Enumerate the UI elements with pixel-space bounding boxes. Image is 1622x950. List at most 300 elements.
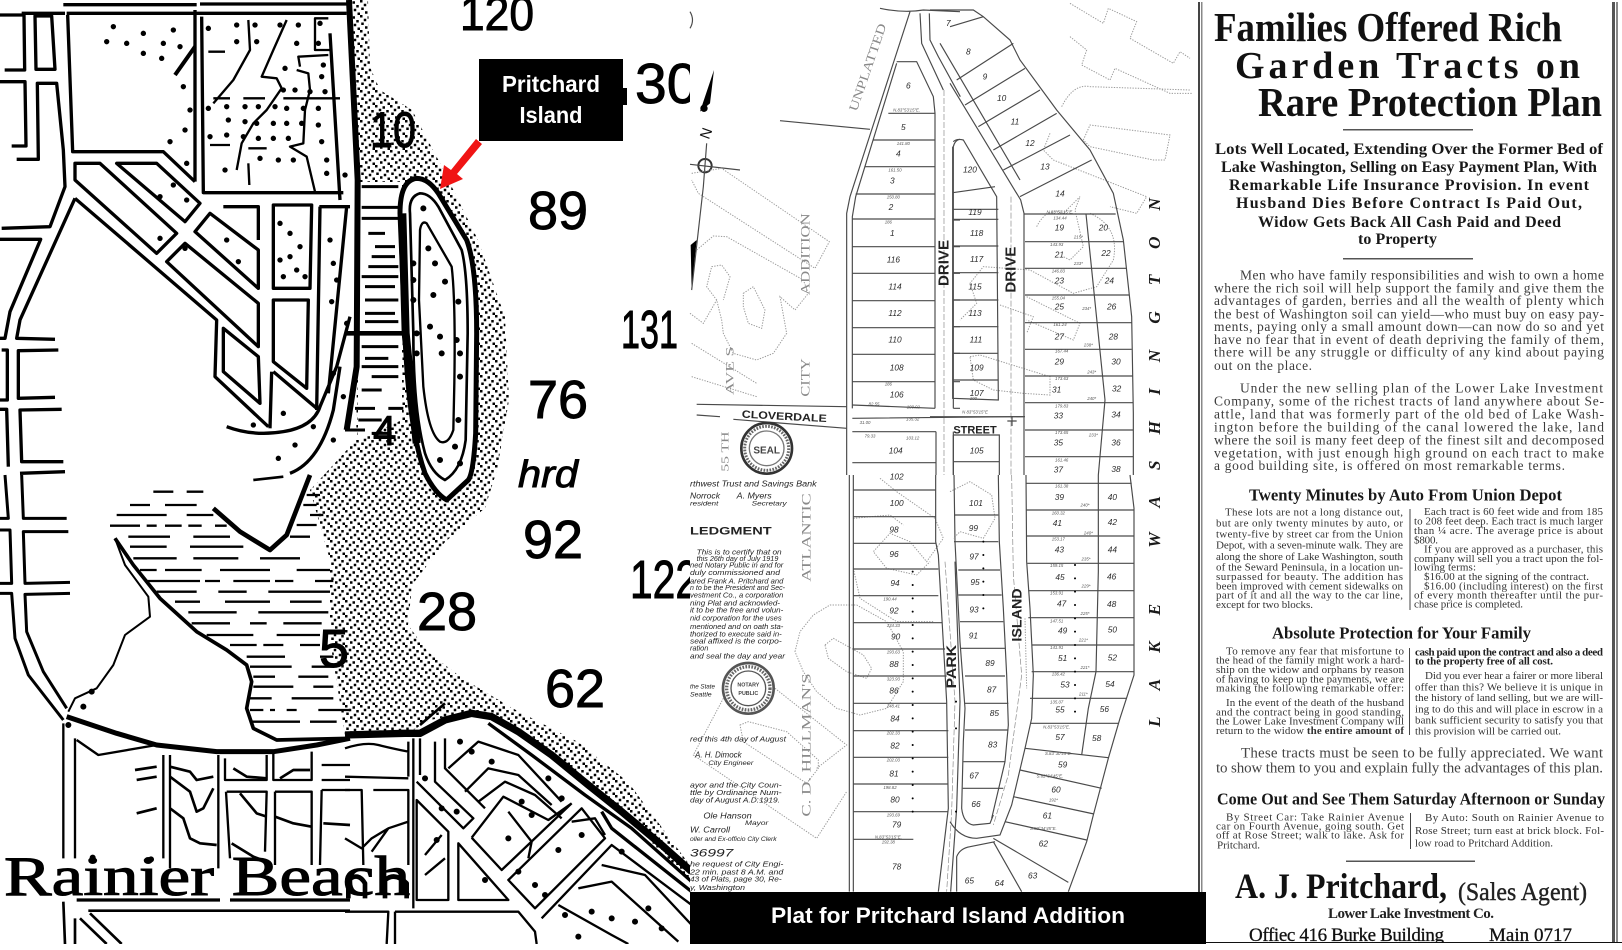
number 10: 10 (370, 102, 416, 158)
lot numbers: 323.93 (887, 676, 901, 681)
column: tract terms: to 208 feet deep. Each tract is much larger (1414, 515, 1603, 527)
column: distance: of the Seward Peninsula, in a location un- (1216, 562, 1403, 574)
number 89: 89 (528, 181, 588, 241)
lot numbers east rows: 115 (968, 281, 982, 291)
lot numbers: 202.33 (886, 730, 901, 735)
lot numbers east rows: 29 (1054, 356, 1064, 366)
column: remove any fear: the head of the family might work a hard- (1216, 655, 1404, 667)
corner seal (741, 423, 792, 474)
column: distance: Depot, with a seven-minute walk. They are (1216, 540, 1403, 552)
paragraph: family responsibilities: Men who have family responsibilities and wish to own a home (1240, 267, 1604, 282)
approval signatures: W. Carroll (690, 824, 731, 834)
column: remove any fear: To remove any fear that misfortune to (1226, 645, 1404, 657)
number 4: 4 (373, 407, 396, 454)
lot numbers: 39 (1055, 492, 1064, 502)
subheadline: Remarkable Life Insurance Provision. In event (1229, 177, 1590, 194)
lot numbers: 93 (969, 605, 979, 615)
acknowledgment paragraph: duly commissioned and (690, 568, 781, 577)
column: by street car: off at Rose Street; walk to lake. Ask for (1216, 830, 1404, 842)
lot numbers east rows: 109 (970, 362, 984, 372)
compass rose: N (698, 126, 716, 141)
lot numbers east rows: 119 (968, 207, 982, 217)
number 122: 122 (630, 550, 698, 610)
acknowledgment paragraph: n to be the President and Sec- (690, 583, 786, 592)
lot numbers: 44 (1108, 544, 1117, 554)
number 62: 62 (545, 659, 605, 719)
street name: Cloverdale: CLOVERDALE (742, 409, 827, 425)
lot numbers: S.82°34'45"E. (1030, 826, 1057, 831)
column: remove any fear: and the contract being in good standing, (1216, 706, 1404, 718)
column: fairer offer: the history of land selling, but we are will- (1415, 692, 1603, 704)
lot numbers: 221* (1080, 665, 1090, 670)
column: distance: been improved with cement sidewalks on (1216, 580, 1404, 592)
hard label: hrd (518, 454, 580, 496)
lot numbers east rows: 113 (968, 308, 982, 318)
column: distance (1216, 507, 1404, 611)
acknowledgment paragraph: thorized to execute said in- (690, 630, 782, 639)
lot numbers west row: 6 (906, 81, 911, 91)
column: tract terms: of every month thereafter until the pur- (1414, 590, 1603, 602)
lot numbers: 60 (1051, 785, 1061, 795)
lot numbers: 50 (1108, 625, 1117, 635)
lot numbers: 100 (890, 498, 904, 508)
acknowledgment paragraph: mentioned and on oath sta- (690, 622, 784, 631)
column: distance: These lots are not a long distance out, (1225, 507, 1403, 519)
lot numbers east rows: 25 (1054, 301, 1064, 311)
lot numbers: 161.38 (1055, 484, 1069, 489)
lot numbers east rows: 21 (1054, 250, 1064, 260)
subheadline: Husband Dies Before Contract Is Paid Out, (1236, 195, 1582, 212)
lot numbers west row: 141.80 (897, 141, 911, 146)
panel: plat for Pritchard Island Addition (689, 3, 1206, 944)
heading: Come Out: Come Out and See Them Saturday Afternoon or Sunday (1217, 789, 1605, 808)
paragraph: family responsibilities: the best of Washington soil can yield—who must buy on easy pay- (1214, 306, 1604, 321)
acknowledgment paragraph: ration (690, 644, 708, 653)
paragraph: selling plan: Company, some of the richest tracts of land anywhere about Se- (1214, 393, 1604, 408)
rule (1343, 258, 1473, 260)
lot numbers east rows: 14 (1055, 189, 1065, 199)
lot numbers: 55 (1055, 705, 1065, 715)
lot numbers west row: 82.55 (869, 401, 880, 406)
lot numbers: 81 (889, 769, 899, 779)
lot numbers east rows: 117 (970, 254, 984, 264)
lot numbers: N.83°53'15"E. (875, 834, 902, 839)
panel: newspaper advertisement (1198, 2, 1622, 946)
lot numbers: 102 (890, 471, 904, 481)
lot numbers: 101 (969, 498, 983, 508)
lot numbers: 67 (969, 771, 979, 781)
lot numbers east rows: 120 (963, 165, 977, 175)
column: distance: twenty-five by street car from the Union (1216, 528, 1404, 540)
lot numbers: 82 (890, 740, 900, 750)
lot numbers: 248.41 (886, 704, 901, 709)
road name: Drive east: DRIVE (1004, 246, 1020, 293)
approval signatures: oller and Ex-officio City Clerk (690, 837, 778, 843)
company: Lower Lake Investment Co. (1328, 906, 1494, 922)
column: tract terms: than ¼ acre. The average price is about (1414, 525, 1603, 537)
road name: Island: ISLAND (1009, 588, 1025, 642)
acknowledgment paragraph: it to be the free and volun- (690, 605, 784, 614)
lot numbers (875, 471, 904, 871)
column: remove any fear: ship on the widow and orphans by reason (1216, 664, 1404, 676)
lot numbers: 57 (1055, 732, 1065, 742)
lot numbers west row: 186 (885, 219, 893, 224)
plat north-west sheet (690, 8, 1023, 475)
subheadline: Widow Gets Back All Cash Paid and Deed (1258, 214, 1561, 231)
lot numbers: 134.33 (887, 623, 901, 628)
lot numbers: 62 (1039, 839, 1048, 849)
road name: Park: PARK (943, 645, 959, 688)
contour lines (690, 168, 829, 397)
lot numbers east rows: 37 (1054, 465, 1063, 475)
column: tract terms: company will sell you a tract upon the fol- (1414, 553, 1603, 565)
number 28: 28 (417, 582, 477, 642)
lot numbers east rows: 36 (1111, 437, 1121, 447)
callout: Pritchard Island label: Island (520, 102, 582, 128)
lot numbers: 51 (1058, 653, 1067, 663)
label: City: CITY (798, 358, 812, 397)
lot numbers west row: 112 (888, 308, 902, 318)
subheadline: Lake Washington, Selling on Easy Payment Plan, With (1221, 159, 1597, 176)
lot numbers east rows: 240* (1086, 396, 1096, 401)
lot numbers: 53 (1060, 680, 1070, 690)
column: tract terms: $16.00 at the signing of the contract. (1424, 571, 1589, 583)
trust signature block: Norrock (690, 490, 721, 500)
lot numbers east rows: 105 (970, 445, 984, 455)
lot numbers: 63 (1028, 871, 1038, 881)
lot numbers west row: 3 (890, 175, 895, 185)
lot numbers west row: 31.00 (860, 420, 871, 425)
trust signature block: Secretary (752, 502, 788, 508)
label: C. D. Hillman's: C. D. HILLMAN'S (800, 673, 814, 817)
lot numbers: 40 (1108, 492, 1117, 502)
plat south-west sheet (689, 471, 960, 892)
lot numbers: 61 (1043, 810, 1052, 820)
lot numbers: 88 (889, 659, 899, 669)
paragraph: selling plan (1214, 381, 1604, 473)
lot numbers: 47 (1057, 599, 1067, 609)
lot numbers east rows: 161.24 (1053, 322, 1067, 327)
lot numbers: 78 (892, 861, 902, 871)
lot numbers east rows: 38 (1111, 464, 1121, 474)
lot numbers: S.82°34'45"E. (1037, 774, 1063, 779)
lot numbers: 221* (1078, 638, 1088, 643)
column: by street car: Pritchard. (1217, 839, 1260, 851)
street name: Street: STREET (953, 424, 997, 436)
lot numbers east rows: 32 (1112, 384, 1122, 394)
number 131: 131 (621, 300, 678, 360)
lot numbers east rows: 33 (1054, 410, 1063, 420)
trees and marks (107, 23, 347, 458)
paragraph: family responsibilities: have no fear that in event of death depriving the family of them, (1214, 332, 1604, 347)
lot numbers west row: 186 (885, 382, 893, 387)
label: Ave S: AVE S (724, 347, 736, 395)
column rules (1198, 2, 1622, 944)
paragraph: family responsibilities: where the rich soil will help support the family and give them the (1214, 280, 1604, 295)
column: tract terms: lowing terms: (1414, 562, 1476, 574)
lot numbers: 141.91 (1050, 645, 1064, 650)
plat south-east sheet (943, 475, 1134, 892)
agent name: A. J. Pritchard, (1235, 866, 1447, 906)
acknowledgment paragraph: Seattle (690, 693, 712, 699)
divider (1410, 509, 1411, 610)
lot numbers east rows: 161.46 (1055, 457, 1069, 462)
lot numbers east rows: 100 (970, 396, 978, 401)
approval signatures: y, Washington (689, 883, 745, 892)
lot numbers: 56 (1100, 704, 1109, 714)
trust signature block: A. Myers (736, 490, 772, 500)
paragraph: selling plan: Under the new selling plan of the Lower Lake Investment (1240, 381, 1603, 396)
island outlines (400, 178, 477, 500)
lot numbers: 192.38 (882, 840, 896, 845)
rule (1346, 860, 1475, 862)
lot numbers: 202.03 (886, 758, 901, 763)
paragraph: family responsibilities (1214, 267, 1604, 373)
paragraph: selling plan: where the soil is many feet deep of the finest silt and decomposed (1214, 432, 1604, 447)
paragraph: family responsibilities: there will be any struggle or difficulty of any kind about paying (1214, 345, 1604, 360)
number 30: 30 (635, 52, 698, 116)
callout: Pritchard Island label: Pritchard (502, 71, 600, 97)
lot numbers east rows: 13 (1040, 161, 1050, 171)
paragraph: selling plan: attle, land that was formerly part of the old bed of Lake Wash- (1214, 407, 1604, 422)
headline: Garden Tracts on (1235, 45, 1580, 87)
lot numbers west row: 150.80 (887, 194, 901, 199)
lot numbers east rows: 167.44 (1055, 349, 1069, 354)
road name: Drive: DRIVE (937, 240, 953, 286)
lot numbers: S.83°30'45"E. (1045, 751, 1072, 756)
closing statement: These tracts must be seen to be fully appreciated. We want (1241, 745, 1604, 761)
trust signature block: rthwest Trust and Savings Bank (690, 479, 818, 489)
divider (1410, 813, 1411, 849)
column: fairer offer: ing to do this and will place in escrow in a (1415, 703, 1603, 715)
lot numbers west row: 1 (890, 228, 895, 238)
lot numbers east rows: 34 (1111, 410, 1121, 420)
lot numbers east rows: 20 (1098, 223, 1108, 233)
heading: Absolute Protection: Absolute Protection for Your Family (1272, 623, 1531, 642)
callout: Pritchard Island label (479, 59, 627, 141)
column: remove any fear: the Lower Lake Investment Company will (1216, 716, 1404, 728)
lot numbers: 135.07 (1050, 699, 1064, 704)
column: by auto: Rose Street; turn east at brick block. Fol- (1415, 825, 1604, 837)
lot numbers: 192* (1049, 798, 1058, 803)
lot numbers east rows: 35 (1054, 437, 1063, 447)
number 5: 5 (319, 619, 349, 679)
lot numbers east rows: 173.63 (1055, 376, 1069, 381)
lot numbers: 193.69 (887, 812, 901, 817)
lot numbers: 159.15 (1050, 563, 1064, 568)
column: by auto (1415, 812, 1604, 850)
lot numbers east rows (962, 46, 1122, 475)
lot numbers: 193.63 (887, 650, 901, 655)
lot numbers: 97 (969, 551, 979, 561)
acknowledgment paragraph: This is to certify that on (697, 547, 782, 556)
acknowledgment paragraph: nid corporation for the uses (690, 614, 782, 623)
lot numbers: 48 (1107, 599, 1117, 609)
lake name: Lake Washington: LAKE WASHINGTON (1145, 197, 1164, 728)
headline (1214, 12, 1602, 116)
trust signature block: resident (690, 502, 719, 508)
south-east coast and neighbourhood grid (345, 703, 692, 944)
lot numbers west row: 5 (901, 122, 906, 132)
lot numbers west row: 161.50 (888, 168, 902, 173)
number 76: 76 (528, 370, 588, 430)
approval signatures: ayor and the City Coun- (690, 781, 782, 790)
lot numbers east rows: 155.04 (1052, 295, 1066, 300)
lot numbers: 136.42 (1052, 672, 1066, 677)
acknowledgment paragraph: ned Notary Public in and for (690, 561, 784, 570)
lot numbers west row: 108 (890, 362, 904, 372)
lot numbers: 89 (985, 658, 995, 668)
street grid north-west (0, 4, 350, 473)
column: distance: surpassed for beauty. The addition has (1216, 571, 1403, 583)
lot numbers: 64 (995, 878, 1004, 888)
lot numbers: 95 (970, 577, 980, 587)
column: tract terms (1414, 506, 1604, 611)
lot numbers: 96 (889, 549, 899, 559)
lot numbers east rows: 11 (1011, 116, 1019, 126)
survey cross (1007, 416, 1017, 426)
lot numbers: 83 (988, 740, 998, 750)
lot numbers: 65 (965, 875, 974, 885)
lot numbers: N.83°53'15"E. (1043, 724, 1070, 729)
paragraph: family responsibilities: ments, paying only a small amount down—can now do so and yet (1214, 319, 1604, 334)
lot numbers east rows: 19 (1055, 223, 1064, 233)
lot numbers: 91 (969, 631, 978, 641)
lot numbers: 43 (1055, 544, 1064, 554)
column: distance: except for two blocks. (1216, 599, 1313, 611)
lot numbers west row: 114 (888, 281, 902, 291)
lot numbers east rows: 238* (1083, 343, 1093, 348)
trust signature block (690, 479, 818, 508)
column: tract terms: $800. (1414, 534, 1438, 546)
lot numbers: 235* (1081, 556, 1091, 561)
lot numbers: 99 (969, 523, 978, 533)
lot numbers: 84 (890, 714, 900, 724)
column: by street car (1216, 812, 1404, 851)
acknowledgment paragraph: seal affixed is the corpo- (690, 636, 782, 645)
column: tract terms: $16.00 (including interest) on the first (1424, 580, 1603, 592)
lot numbers west row: 4 (896, 149, 901, 159)
lot numbers east rows: 111 (970, 335, 982, 345)
approval signatures: 36997 (690, 848, 734, 860)
lot numbers east rows: 27 (1054, 331, 1064, 341)
column: tract terms: Each tract is 60 feet wide and from 185 (1424, 506, 1604, 518)
lot numbers west row: 106 (890, 390, 904, 400)
lot numbers east rows: N 83°53'15"E (962, 409, 988, 414)
lot numbers east rows: 146.83 (1052, 269, 1066, 274)
acknowledgment paragraph (690, 547, 786, 699)
approval signatures: day of August A.D.1919. (690, 795, 780, 804)
map numbers (319, 0, 698, 719)
lot numbers: 45 (1055, 572, 1065, 582)
phone: Main 0717 (1489, 925, 1572, 946)
lot numbers east rows: 134.44 (1053, 215, 1067, 220)
lot numbers east rows: 9 (983, 71, 988, 81)
shoreline and streets south-west (0, 475, 350, 944)
headline: Rare Protection Plan (1258, 79, 1602, 125)
lot numbers: 94 (890, 578, 900, 588)
hatch lines and island shoreline (345, 0, 477, 500)
lot numbers: 229* (1081, 584, 1091, 589)
subheadline: to Property (1358, 231, 1437, 248)
lot numbers west row: 103.12 (906, 435, 920, 440)
column: fairer offer: bank sufficient security to satisfy you that (1415, 714, 1603, 726)
column: fairer offer: Did you ever hear a fairer or more liberal (1425, 670, 1603, 682)
lot numbers: 225* (1080, 611, 1090, 616)
lot numbers: 92 (889, 605, 899, 615)
approval signatures: City Engineer (708, 760, 754, 767)
approval signatures: Mayor (745, 820, 770, 827)
acknowledgment paragraph: this 26th day of July 1919 (697, 554, 778, 563)
lot numbers east rows: 243* (1086, 369, 1096, 374)
lot numbers: 80 (890, 795, 900, 805)
paragraph: selling plan: a good building site, is offered on most remarkable terms. (1214, 458, 1565, 473)
column: distance: along the shore of Lake Washington, south (1216, 551, 1404, 563)
column: tract terms: If you are approved as a purchaser, this (1424, 544, 1603, 556)
approval signatures: red this 4th day of August (690, 735, 787, 744)
column: by street car: By Street Car: Take Rainier Avenue (1226, 812, 1404, 824)
column: remove any fear: In the event of the death of the husband (1226, 697, 1404, 709)
number 92: 92 (523, 510, 583, 570)
panel: historic map of Rainier Beach (0, 0, 698, 944)
rule (1343, 129, 1473, 130)
hatching (110, 492, 350, 722)
lot numbers: 79 (892, 820, 902, 830)
lot numbers east rows: 215* (1073, 234, 1083, 239)
lot numbers east rows: 179.83 (1055, 403, 1069, 408)
lot numbers: 147.51 (1050, 618, 1064, 623)
subheadline: Lots Well Located, Extending Over the Former Bed of (1215, 141, 1604, 158)
heading: Twenty Minutes: Twenty Minutes by Auto From Union Depot (1249, 486, 1562, 505)
acknowledgment paragraph: ared Frank A. Pritchard and (690, 576, 784, 585)
column: remove any fear (1216, 645, 1404, 737)
lot numbers: 87 (987, 685, 997, 695)
subheadline (1215, 141, 1604, 248)
column: tract terms: chase price is completed. (1414, 599, 1523, 611)
lot numbers east rows: 173.65 (1055, 430, 1069, 435)
label: Atlantic: ATLANTIC (800, 493, 814, 582)
lot numbers (965, 484, 1117, 888)
headline: Families Offered Rich (1214, 4, 1562, 50)
lot numbers west row: 135.32 (906, 417, 920, 422)
lot numbers: 52 (1108, 652, 1117, 662)
compass rose (690, 70, 740, 291)
closing statement (1216, 745, 1604, 776)
column: by auto: By Auto: South on Rainier Avenue to (1425, 812, 1604, 824)
lot numbers: 66 (971, 799, 981, 809)
label: Addition: ADDITION (798, 213, 812, 295)
lot numbers east rows: 23 (1054, 275, 1064, 285)
lot numbers east rows: 107 (970, 388, 984, 398)
approval signatures: A. H. Dimock (694, 750, 742, 760)
lot numbers east rows: 233* (1073, 261, 1083, 266)
lot numbers: 42 (1108, 517, 1117, 527)
lot numbers west row: 110 (888, 335, 902, 345)
caption band: Plat for Pritchard Island Addition (771, 903, 1125, 928)
column: distance: part of it and all the way to the car line, (1216, 590, 1403, 602)
column: by street car: car on Fourth Avenue, going south. Get (1216, 820, 1404, 832)
caption band (690, 892, 1206, 944)
label: Unplatted: UNPLATTED (846, 22, 889, 113)
approval signatures: 22 min. past 8 A.M. and (689, 867, 784, 876)
lot numbers west row: 79.33 (865, 433, 876, 438)
lot numbers: 86 (889, 685, 899, 695)
column: fairer offer: this provision will be carried out. (1415, 725, 1561, 737)
lot numbers east rows: 24 (1104, 275, 1114, 285)
lot numbers: 59 (1058, 760, 1068, 770)
lot numbers east rows: 10 (997, 93, 1007, 103)
office address: Offiec 416 Burke Building (1249, 925, 1444, 946)
